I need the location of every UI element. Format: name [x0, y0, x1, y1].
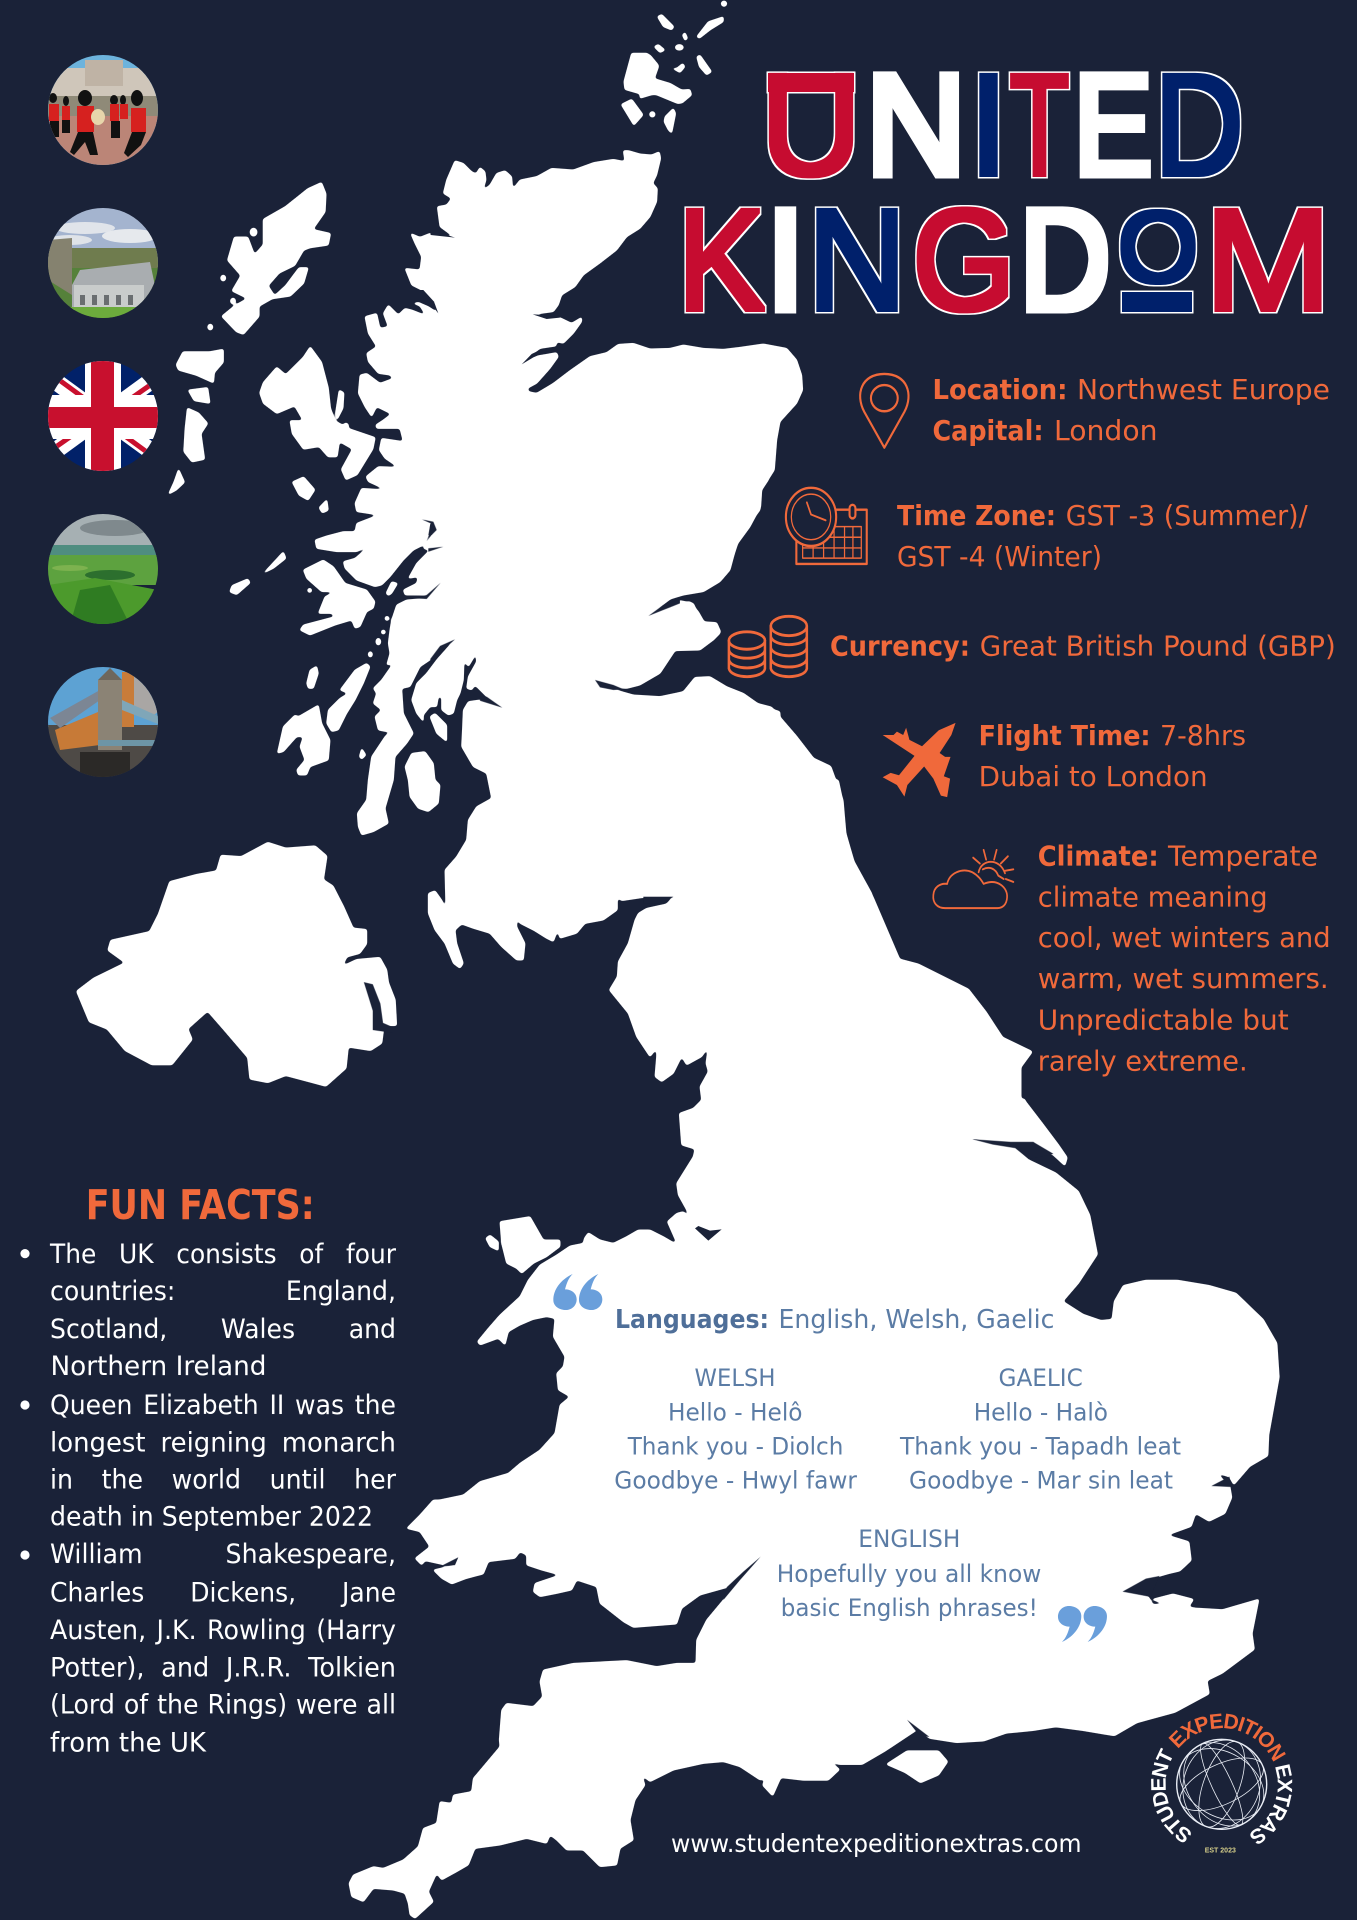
time zone text: GST -3 (Summer)/ — [1066, 499, 1308, 532]
globe wireframe — [1167, 1728, 1277, 1841]
heading: fun facts: FUN FACTS: — [86, 1181, 315, 1229]
icon: opening quotation mark — [553, 1274, 602, 1310]
fun facts list: in the world until her — [50, 1464, 397, 1496]
photo: Cambridge college aerial view — [48, 207, 158, 319]
currency text: Currency: — [830, 630, 970, 662]
fun facts list: countries: England, — [50, 1276, 396, 1307]
flight time text: Dubai to London — [979, 760, 1208, 793]
climate text: Unpredictable but — [1038, 1004, 1289, 1036]
climate text: climate meaning — [1038, 880, 1268, 914]
fun facts list: Queen Elizabeth II was the — [50, 1390, 396, 1421]
icon: airplane — [883, 723, 956, 797]
The Wash, Solent and Thames inlets — [907, 1139, 1232, 1737]
title: UNITED KINGDOM — [678, 44, 1332, 341]
climate text: Climate: — [1038, 840, 1159, 872]
currency text: Great British Pound (GBP) — [980, 630, 1336, 662]
KINGDOM letters with underlined O: I — [765, 180, 806, 340]
North Wales — [432, 1217, 800, 1520]
UNITED letters with flat top bar on U: T — [1010, 45, 1069, 205]
fun facts list: death in September 2022 — [50, 1502, 373, 1532]
languages text block: Hello - Helô — [668, 1398, 802, 1426]
KINGDOM letters with underlined O: G — [912, 180, 1016, 341]
time zone text: GST -4 (Winter) — [897, 540, 1102, 573]
flight time text — [979, 719, 1246, 793]
location and capital text: Northwest Europe — [1077, 373, 1330, 406]
KINGDOM letters with underlined O: K — [678, 180, 764, 341]
UNITED letters with flat top bar on U: D — [1155, 45, 1243, 206]
Mersey estuary — [695, 1226, 722, 1241]
languages text block: WELSH — [694, 1364, 776, 1392]
Skye and Outer Hebrides islands — [169, 54, 691, 594]
fun facts list: William Shakespeare, — [50, 1539, 396, 1570]
South Wales and Southwest England — [349, 1500, 807, 1918]
Northern Scotland and Highlands — [358, 151, 803, 640]
location and capital text: London — [1054, 414, 1158, 447]
icon: stacked coins — [729, 616, 807, 677]
location and capital text: Location: — [932, 373, 1068, 406]
climate text: Temperate — [1167, 840, 1318, 872]
fun facts list — [20, 1239, 397, 1758]
climate text: warm, wet summers. — [1038, 962, 1329, 995]
icon: sun and cloud — [933, 850, 1013, 908]
icon: closing quotation mark — [1058, 1606, 1107, 1642]
KINGDOM letters with underlined O: D — [1020, 179, 1110, 340]
Northern England west coast — [486, 780, 920, 1300]
Strangford Lough — [364, 982, 393, 1033]
fun facts list: Austen, J.K. Rowling (Harry — [50, 1615, 396, 1646]
languages text block: ENGLISH — [858, 1525, 960, 1553]
flight time text: Flight Time: — [979, 719, 1151, 752]
curved wordmark: EXTRAS — [1250, 1764, 1292, 1844]
UNITED letters with flat top bar on U: N — [866, 46, 966, 206]
Severn estuary and Milford Haven — [440, 1557, 761, 1600]
photo: green English countryside — [48, 514, 158, 625]
sea inlets and lough cut into the coastline — [364, 231, 1232, 1737]
Southeast England and East Anglia — [763, 1100, 1279, 1796]
languages text block: Hello - Halò — [974, 1398, 1108, 1426]
icon: location pin — [860, 374, 909, 448]
photo: Tower Bridge London — [48, 667, 165, 777]
UNITED letters with flat top bar on U: I — [968, 44, 1009, 206]
fun facts list: Potter), and J.R.R. Tolkien — [50, 1652, 396, 1683]
fun facts list: The UK consists of four — [49, 1239, 397, 1270]
time zone text: Time Zone: — [897, 499, 1056, 532]
location and capital text: Capital: — [932, 414, 1044, 447]
inlets of northern Scotland — [420, 231, 560, 364]
fun facts list: Scotland, Wales and — [50, 1314, 396, 1345]
curved wordmark: EXPEDITION — [1168, 1714, 1286, 1762]
flight time text: 7-8hrs — [1160, 719, 1246, 752]
icon: clock and calendar — [786, 488, 867, 564]
fun facts list: Charles Dickens, Jane — [50, 1577, 396, 1608]
UNITED letters with flat top bar on U: E — [1074, 44, 1152, 205]
KINGDOM letters with underlined O — [678, 179, 1332, 341]
climate text: rarely extreme. — [1038, 1044, 1248, 1078]
fun facts list: Northern Ireland — [50, 1351, 266, 1382]
languages text block: Thank you - Tapadh leat — [899, 1432, 1181, 1460]
UNITED letters with flat top bar on U: U — [761, 46, 861, 206]
Orkney and Shetland islands — [640, 0, 727, 133]
languages text block: GAELIC — [998, 1364, 1083, 1392]
KINGDOM letters with underlined O: N — [808, 179, 906, 340]
firths and lochs of central Scotland — [417, 519, 680, 904]
languages text block: basic English phrases! — [781, 1594, 1038, 1622]
time zone text — [897, 499, 1308, 573]
languages text block: Goodbye - Mar sin leat — [909, 1467, 1173, 1495]
languages text block: Hopefully you all know — [777, 1560, 1041, 1588]
climate text — [1038, 840, 1331, 1078]
fun facts list: longest reigning monarch — [50, 1427, 396, 1458]
languages text block: Thank you - Diolch — [627, 1432, 843, 1460]
languages text block: English, Welsh, Gaelic — [778, 1305, 1054, 1335]
curved wordmark — [1151, 1714, 1292, 1844]
climate text: cool, wet winters and — [1038, 921, 1331, 954]
photo: royal guards at Buckingham Palace — [48, 55, 158, 165]
Northern Ireland — [77, 843, 396, 1086]
Central and Southern Scotland with Firths — [263, 480, 780, 968]
currency text — [830, 630, 1336, 662]
logo: Student Expedition Extras — [1151, 1714, 1292, 1854]
fun facts list: from the UK — [50, 1727, 207, 1758]
fun facts list: (Lord of the Rings) were all — [50, 1690, 396, 1720]
UNITED letters with flat top bar on U — [761, 44, 1243, 206]
Northern England east coast — [700, 700, 1031, 1300]
KINGDOM letters with underlined O: M — [1204, 180, 1332, 341]
languages text block: Goodbye - Hwyl fawr — [614, 1467, 857, 1495]
established year: EST 2023 — [1205, 1848, 1236, 1854]
languages text block — [614, 1305, 1181, 1622]
photo: Union Jack flag — [48, 361, 158, 471]
KINGDOM letters with underlined O: O — [1118, 191, 1198, 303]
languages text block: Languages: — [615, 1305, 769, 1335]
website url: www.studentexpeditionextras.com — [671, 1829, 1082, 1858]
location and capital text — [932, 373, 1330, 447]
curved wordmark: STUDENT — [1151, 1748, 1191, 1842]
